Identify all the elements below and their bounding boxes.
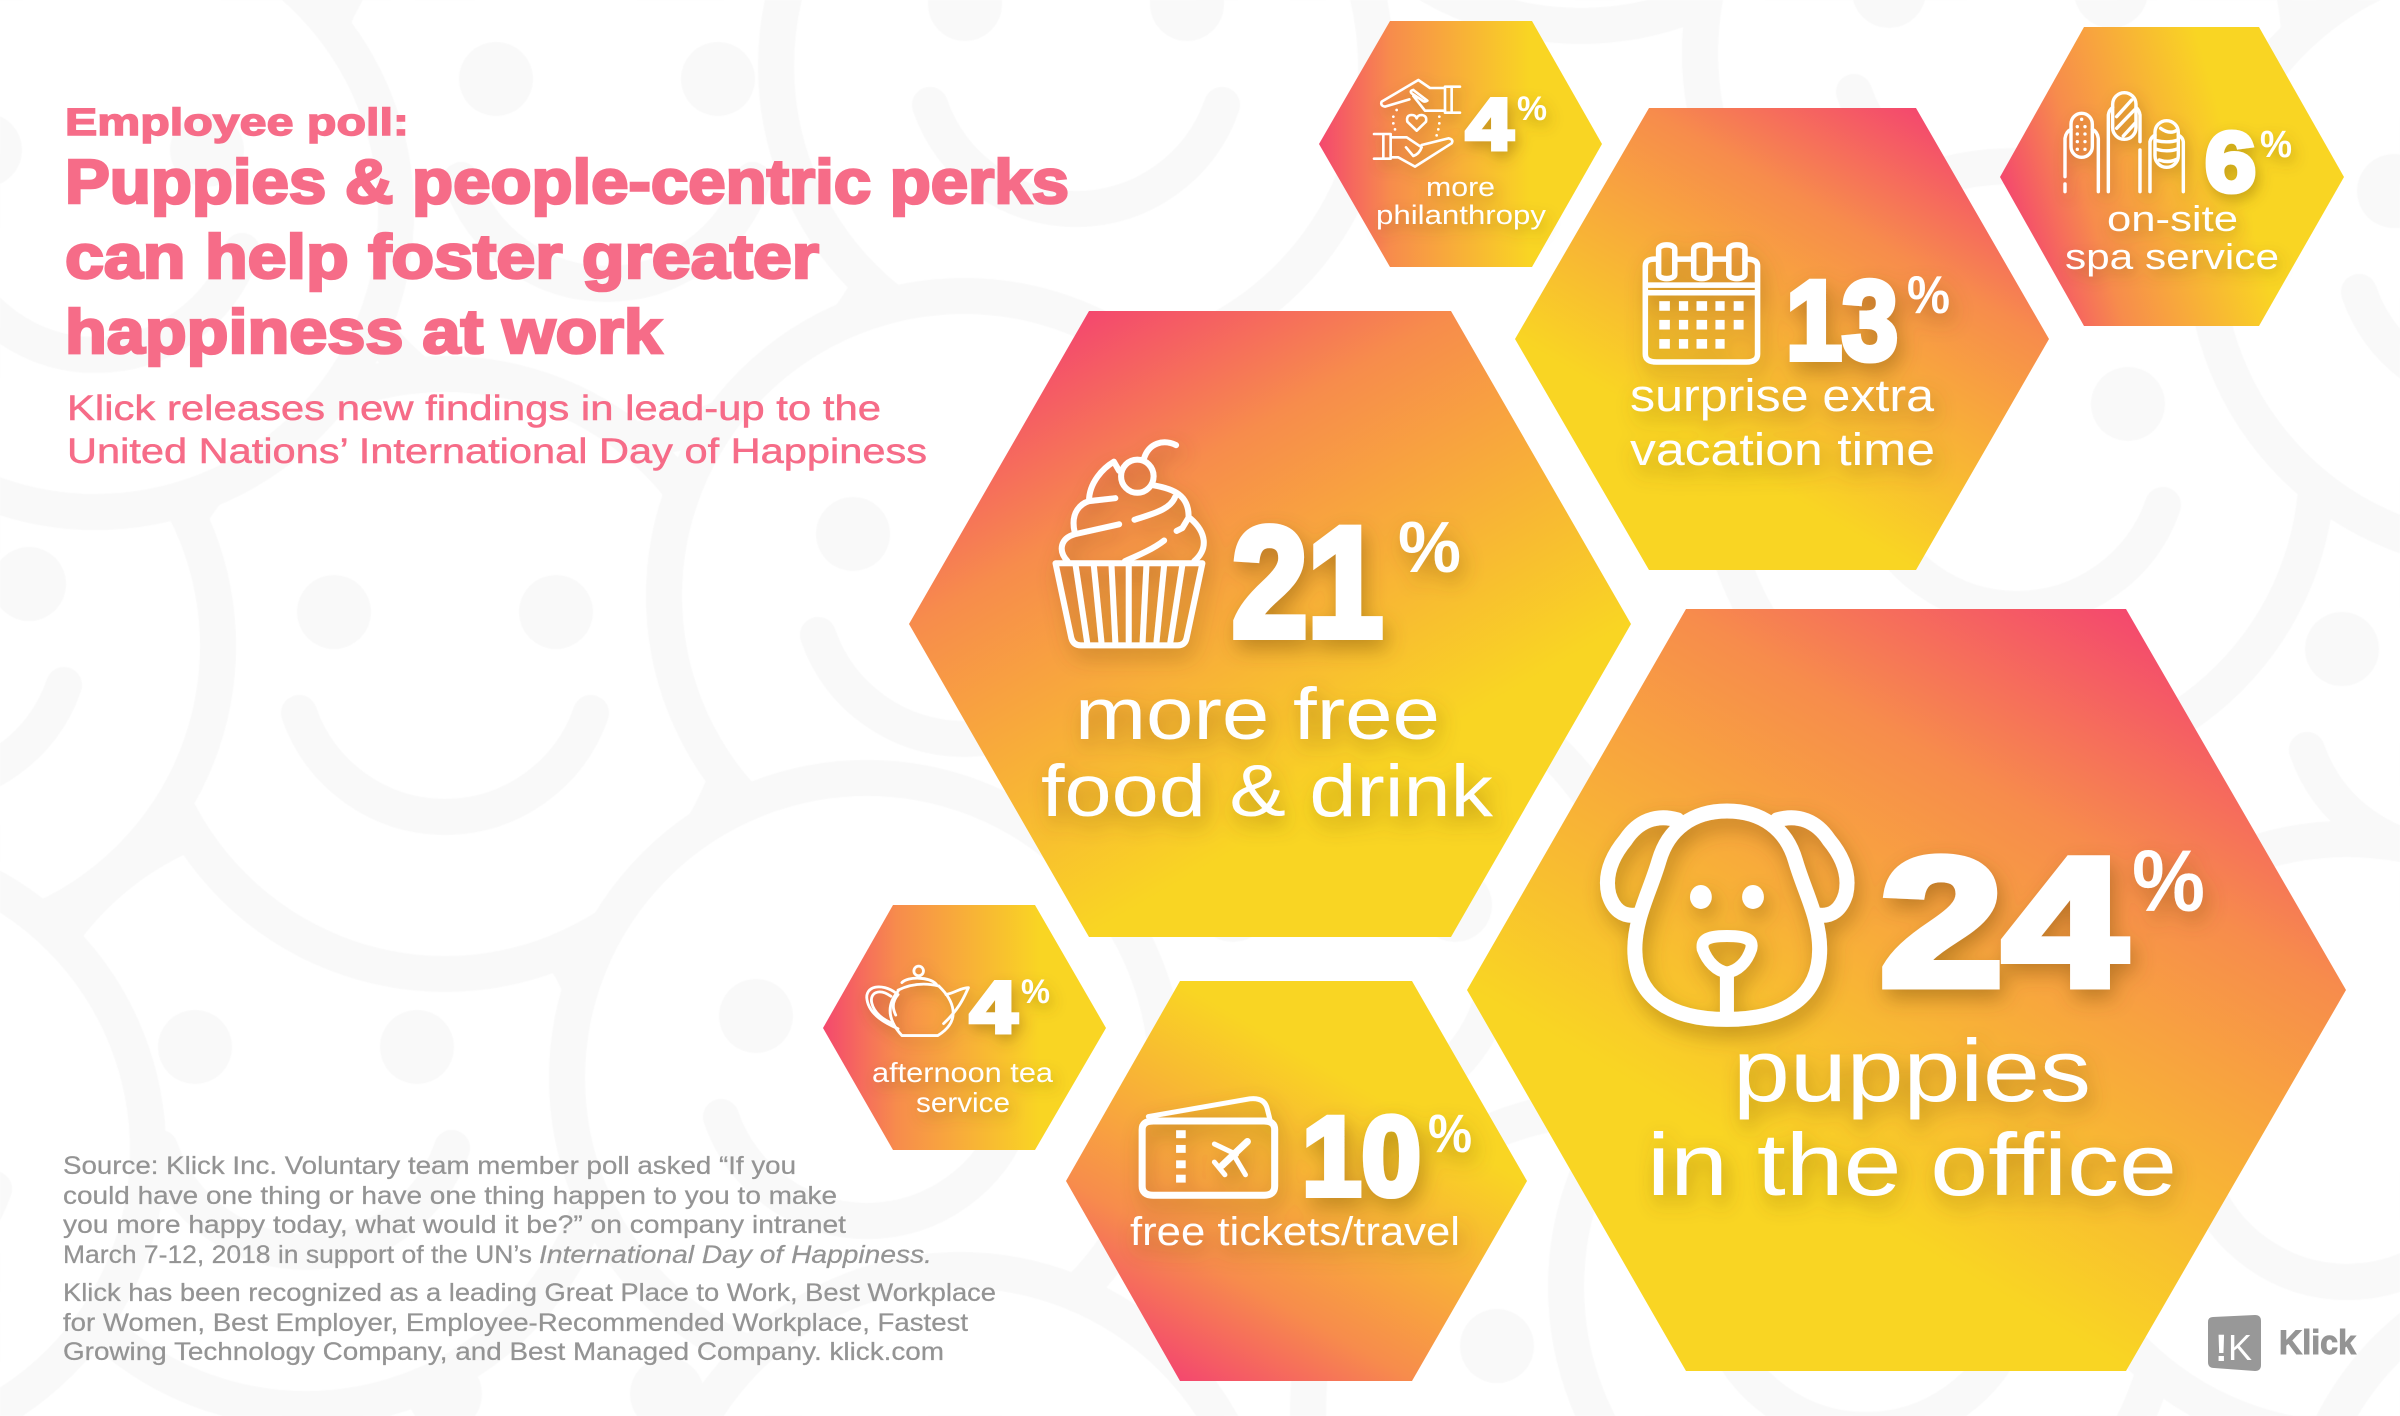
title: happiness at work — [65, 298, 663, 367]
value: 4 — [970, 968, 1017, 1048]
value: 10 — [1302, 1094, 1421, 1219]
source note: International Day of Happiness. — [539, 1241, 932, 1269]
panel: more philanthropy 4% — [1319, 21, 1602, 267]
panel: afternoon tea service 4%: % — [1021, 973, 1050, 1011]
value: 13 — [1786, 258, 1898, 383]
label: more — [1426, 172, 1495, 202]
panel: surprise extra vacation time 13%: % — [1907, 266, 1950, 325]
panel: more free food and drink 21%: % — [1398, 508, 1461, 588]
icon: manicured fingers — [2065, 93, 2183, 192]
panel: on-site spa service 6%: % — [2260, 124, 2292, 166]
source note: you more happy today, what would it be?” on company intranet — [63, 1211, 846, 1239]
label: surprise extra — [1630, 370, 1935, 421]
label: service — [916, 1087, 1010, 1118]
recognition note: Klick has been recognized as a leading Great Place to Work, Best Workplace — [63, 1279, 996, 1307]
source note: Source: Klick Inc. Voluntary team member poll asked “If you — [63, 1152, 796, 1180]
value: 4 — [1466, 85, 1513, 165]
label — [2065, 198, 2279, 277]
heading block — [65, 102, 1069, 471]
label: more free — [1075, 674, 1440, 755]
label: philanthropy — [1376, 200, 1547, 230]
icon: Klick badge: ! — [2215, 1328, 2228, 1370]
icon: cupcake — [1056, 442, 1204, 645]
subtitle: United Nations’ International Day of Happiness — [67, 432, 927, 471]
kicker: Employee poll: Employee poll: — [65, 102, 409, 144]
label: free tickets/travel — [1130, 1210, 1460, 1254]
title: can help foster greater — [65, 223, 819, 292]
panel: puppies in the office 24%: % — [2132, 833, 2205, 930]
subtitle: Klick releases new findings in lead-up to the — [67, 389, 881, 428]
label — [1376, 172, 1547, 230]
panel: more philanthropy 4%: % — [1517, 90, 1547, 128]
title — [65, 148, 1069, 367]
title: Puppies & people-centric perks — [65, 148, 1069, 217]
label — [1647, 1021, 2177, 1214]
value: 6 — [2205, 115, 2256, 209]
label: afternoon tea — [872, 1057, 1053, 1088]
label — [872, 1057, 1053, 1118]
panel: free tickets/travel 10% — [1066, 981, 1527, 1381]
logo: Klick: Klick — [2279, 1324, 2356, 1362]
label: vacation time — [1630, 424, 1935, 475]
icon: Klick badge — [2208, 1315, 2261, 1371]
icon: teapot — [867, 966, 968, 1036]
subtitle — [67, 389, 927, 471]
icon: hands and heart — [1374, 80, 1460, 167]
label: spa service — [2065, 236, 2279, 277]
panel: more free food and drink 21% — [909, 311, 1631, 937]
icon: dog face — [1607, 811, 1847, 1019]
source note — [63, 1152, 932, 1269]
icon: Klick badge: K — [2228, 1327, 2252, 1368]
source note: could have one thing or have one thing happen to you to make — [63, 1182, 837, 1210]
panel: on-site spa service 6% — [2000, 27, 2344, 326]
value: 24 — [1880, 820, 2126, 1024]
panel: afternoon tea service 4% — [823, 905, 1106, 1150]
label — [1630, 370, 1935, 475]
logo: Klick — [2208, 1315, 2356, 1371]
recognition note: Growing Technology Company, and Best Managed Company. klick.com — [63, 1338, 944, 1366]
source note: March 7-12, 2018 in support of the UN’s — [63, 1241, 532, 1269]
value: 21 — [1232, 496, 1383, 670]
label: on-site — [2107, 198, 2238, 239]
panel: free tickets/travel 10%: % — [1428, 1104, 1472, 1164]
label: puppies — [1733, 1021, 2091, 1120]
label — [1041, 674, 1494, 832]
icon: calendar — [1645, 245, 1758, 362]
recognition note — [63, 1279, 996, 1366]
label: food & drink — [1041, 751, 1494, 832]
panel: puppies in the office 24% — [1467, 609, 2346, 1371]
icon: plane ticket — [1142, 1099, 1275, 1195]
recognition note: for Women, Best Employer, Employee-Recommended Workplace, Fastest — [63, 1309, 968, 1337]
panel: surprise extra vacation time 13% — [1515, 108, 2049, 570]
label: in the office — [1647, 1115, 2177, 1214]
